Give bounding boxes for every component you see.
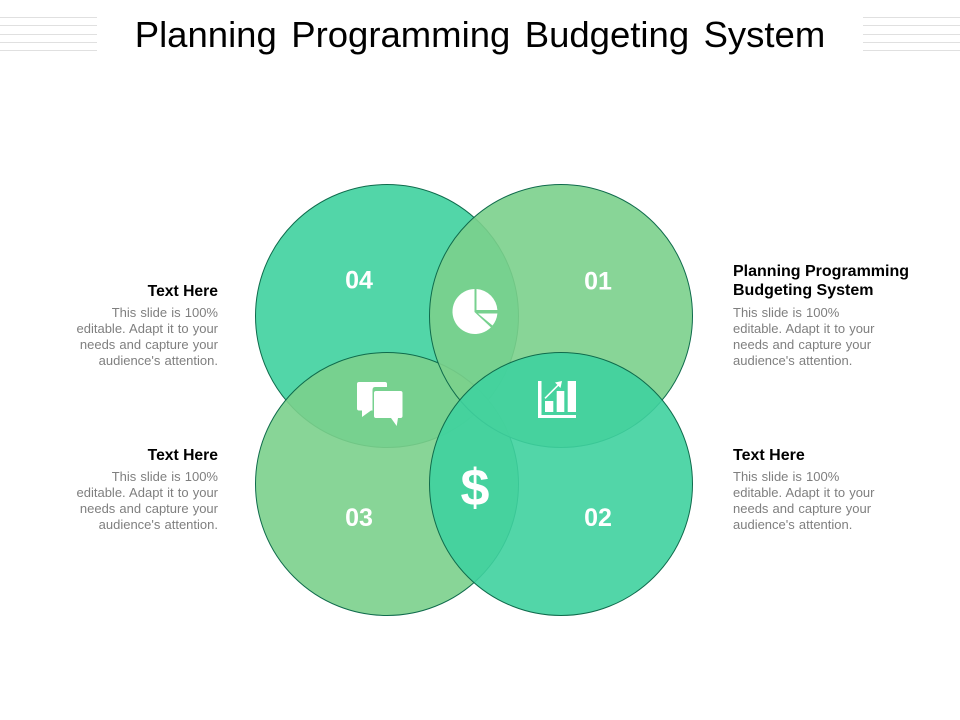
text block: right bottom: audience's attention. bbox=[733, 517, 852, 532]
text block: right top: This slide is 100% bbox=[733, 305, 839, 320]
text block: left bottom: editable. Adapt it to your bbox=[77, 485, 218, 500]
circle 04 bbox=[256, 184, 518, 448]
text block: right bottom: needs and capture your bbox=[733, 501, 871, 516]
circle 02 bbox=[430, 352, 692, 616]
text block: left top: editable. Adapt it to your bbox=[77, 321, 218, 336]
text block: right top: needs and capture your bbox=[733, 337, 871, 352]
circle 01 bbox=[430, 184, 692, 448]
text block: right bottom: editable. Adapt it to your bbox=[733, 485, 874, 500]
text block: left top: audience's attention. bbox=[99, 353, 218, 368]
text block: left top bbox=[77, 283, 218, 368]
text block: left top: Text Here bbox=[148, 283, 218, 300]
icon: pie chart bbox=[452, 289, 497, 334]
text block: right top: Planning Programming bbox=[733, 263, 909, 280]
icon: bar chart with arrow bbox=[538, 381, 576, 418]
number 04: 04 bbox=[345, 266, 373, 294]
text block: right top bbox=[733, 263, 909, 368]
text block: left bottom bbox=[77, 447, 218, 532]
text block: right bottom bbox=[733, 447, 874, 532]
number 02: 02 bbox=[584, 504, 612, 532]
text block: left bottom: Text Here bbox=[148, 447, 218, 464]
text block: left bottom: This slide is 100% bbox=[112, 469, 218, 484]
text block: right top: Budgeting System bbox=[733, 282, 873, 299]
title: Planning Programming Budgeting System bbox=[135, 14, 825, 55]
text block: left top: needs and capture your bbox=[80, 337, 218, 352]
text block: left bottom: audience's attention. bbox=[99, 517, 218, 532]
number 03: 03 bbox=[345, 504, 373, 532]
circle 03 bbox=[256, 352, 518, 616]
text block: left top: This slide is 100% bbox=[112, 305, 218, 320]
text block: right bottom: This slide is 100% bbox=[733, 469, 839, 484]
decorative header lines bbox=[0, 17, 960, 51]
text block: right top: editable. Adapt it to your bbox=[733, 321, 874, 336]
text block: right bottom: Text Here bbox=[733, 447, 805, 464]
icon: dollar sign: $ bbox=[461, 459, 490, 517]
icon: speech bubbles bbox=[357, 382, 402, 426]
text block: right top: audience's attention. bbox=[733, 353, 852, 368]
text block: left bottom: needs and capture your bbox=[80, 501, 218, 516]
number 01: 01 bbox=[584, 268, 612, 296]
